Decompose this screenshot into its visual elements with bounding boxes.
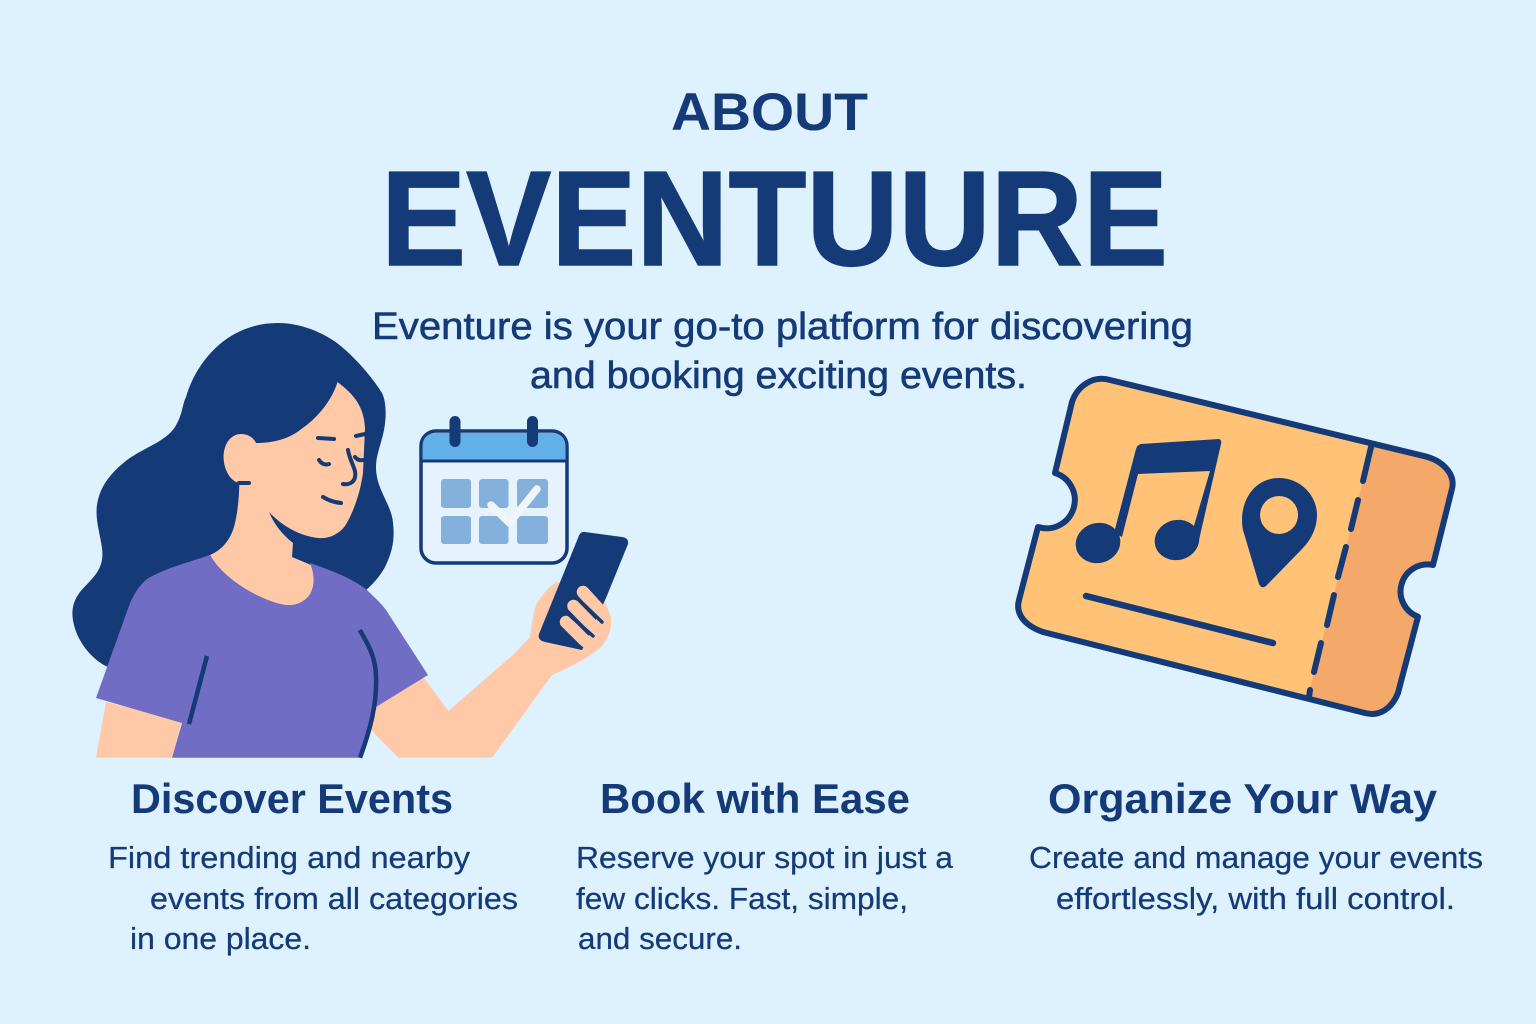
description: events from all categories xyxy=(150,881,518,916)
icon: calendar xyxy=(421,416,567,563)
hair xyxy=(72,323,394,667)
shirt fold lines xyxy=(189,630,376,758)
nose xyxy=(343,450,355,484)
subtitle text: Eventure is your go-to platform for discovering xyxy=(372,306,1193,348)
icon: ticket xyxy=(1018,379,1453,714)
right eyebrow xyxy=(356,434,365,436)
location pin xyxy=(1242,478,1317,587)
description: Reserve your spot in just a xyxy=(576,840,954,875)
music note xyxy=(1071,439,1221,568)
column: Organize Your Way xyxy=(1029,775,1483,916)
heading: Book with Ease xyxy=(600,775,910,822)
calendar day grid xyxy=(441,479,548,544)
description xyxy=(108,840,518,956)
ticket outline xyxy=(1018,379,1453,714)
face details xyxy=(318,434,365,503)
left arm xyxy=(96,702,182,758)
left eyebrow xyxy=(318,438,334,439)
title eyebrow: ABOUT: ABOUT xyxy=(671,83,868,142)
check mark xyxy=(491,489,537,523)
phone xyxy=(539,532,628,650)
mouth xyxy=(323,497,341,503)
title xyxy=(381,83,1168,294)
right arm xyxy=(371,582,611,758)
calendar header xyxy=(422,433,566,460)
ticket text line xyxy=(1086,596,1273,643)
description: Find trending and nearby xyxy=(108,840,471,875)
t-shirt xyxy=(96,555,428,758)
heading: Discover Events xyxy=(131,775,453,822)
face and neck xyxy=(210,382,365,605)
body line xyxy=(360,630,376,758)
description: and secure. xyxy=(578,921,742,956)
description: few clicks. Fast, simple, xyxy=(576,881,908,916)
description xyxy=(1029,840,1483,916)
ticket body xyxy=(1018,379,1453,714)
ear line xyxy=(239,481,249,485)
illustration: woman with phone xyxy=(72,323,628,758)
second eye xyxy=(355,457,363,460)
closed eye xyxy=(319,460,329,464)
sleeve line xyxy=(189,656,207,724)
perforation line xyxy=(1309,447,1371,697)
description xyxy=(576,840,954,956)
calendar rings xyxy=(450,416,460,447)
description: effortlessly, with full control. xyxy=(1056,881,1455,916)
fingers xyxy=(562,592,603,648)
subtitle text: and booking exciting events. xyxy=(530,355,1027,397)
heading: Organize Your Way xyxy=(1048,775,1438,822)
column: Discover Events xyxy=(108,775,518,956)
ticket stub xyxy=(1308,445,1453,714)
description: in one place. xyxy=(130,921,311,956)
description: Create and manage your events xyxy=(1029,840,1483,875)
column: Book with Ease xyxy=(576,775,954,956)
subtitle text xyxy=(372,306,1193,397)
title main: EVENTUURE: EVENTUURE xyxy=(381,143,1168,294)
